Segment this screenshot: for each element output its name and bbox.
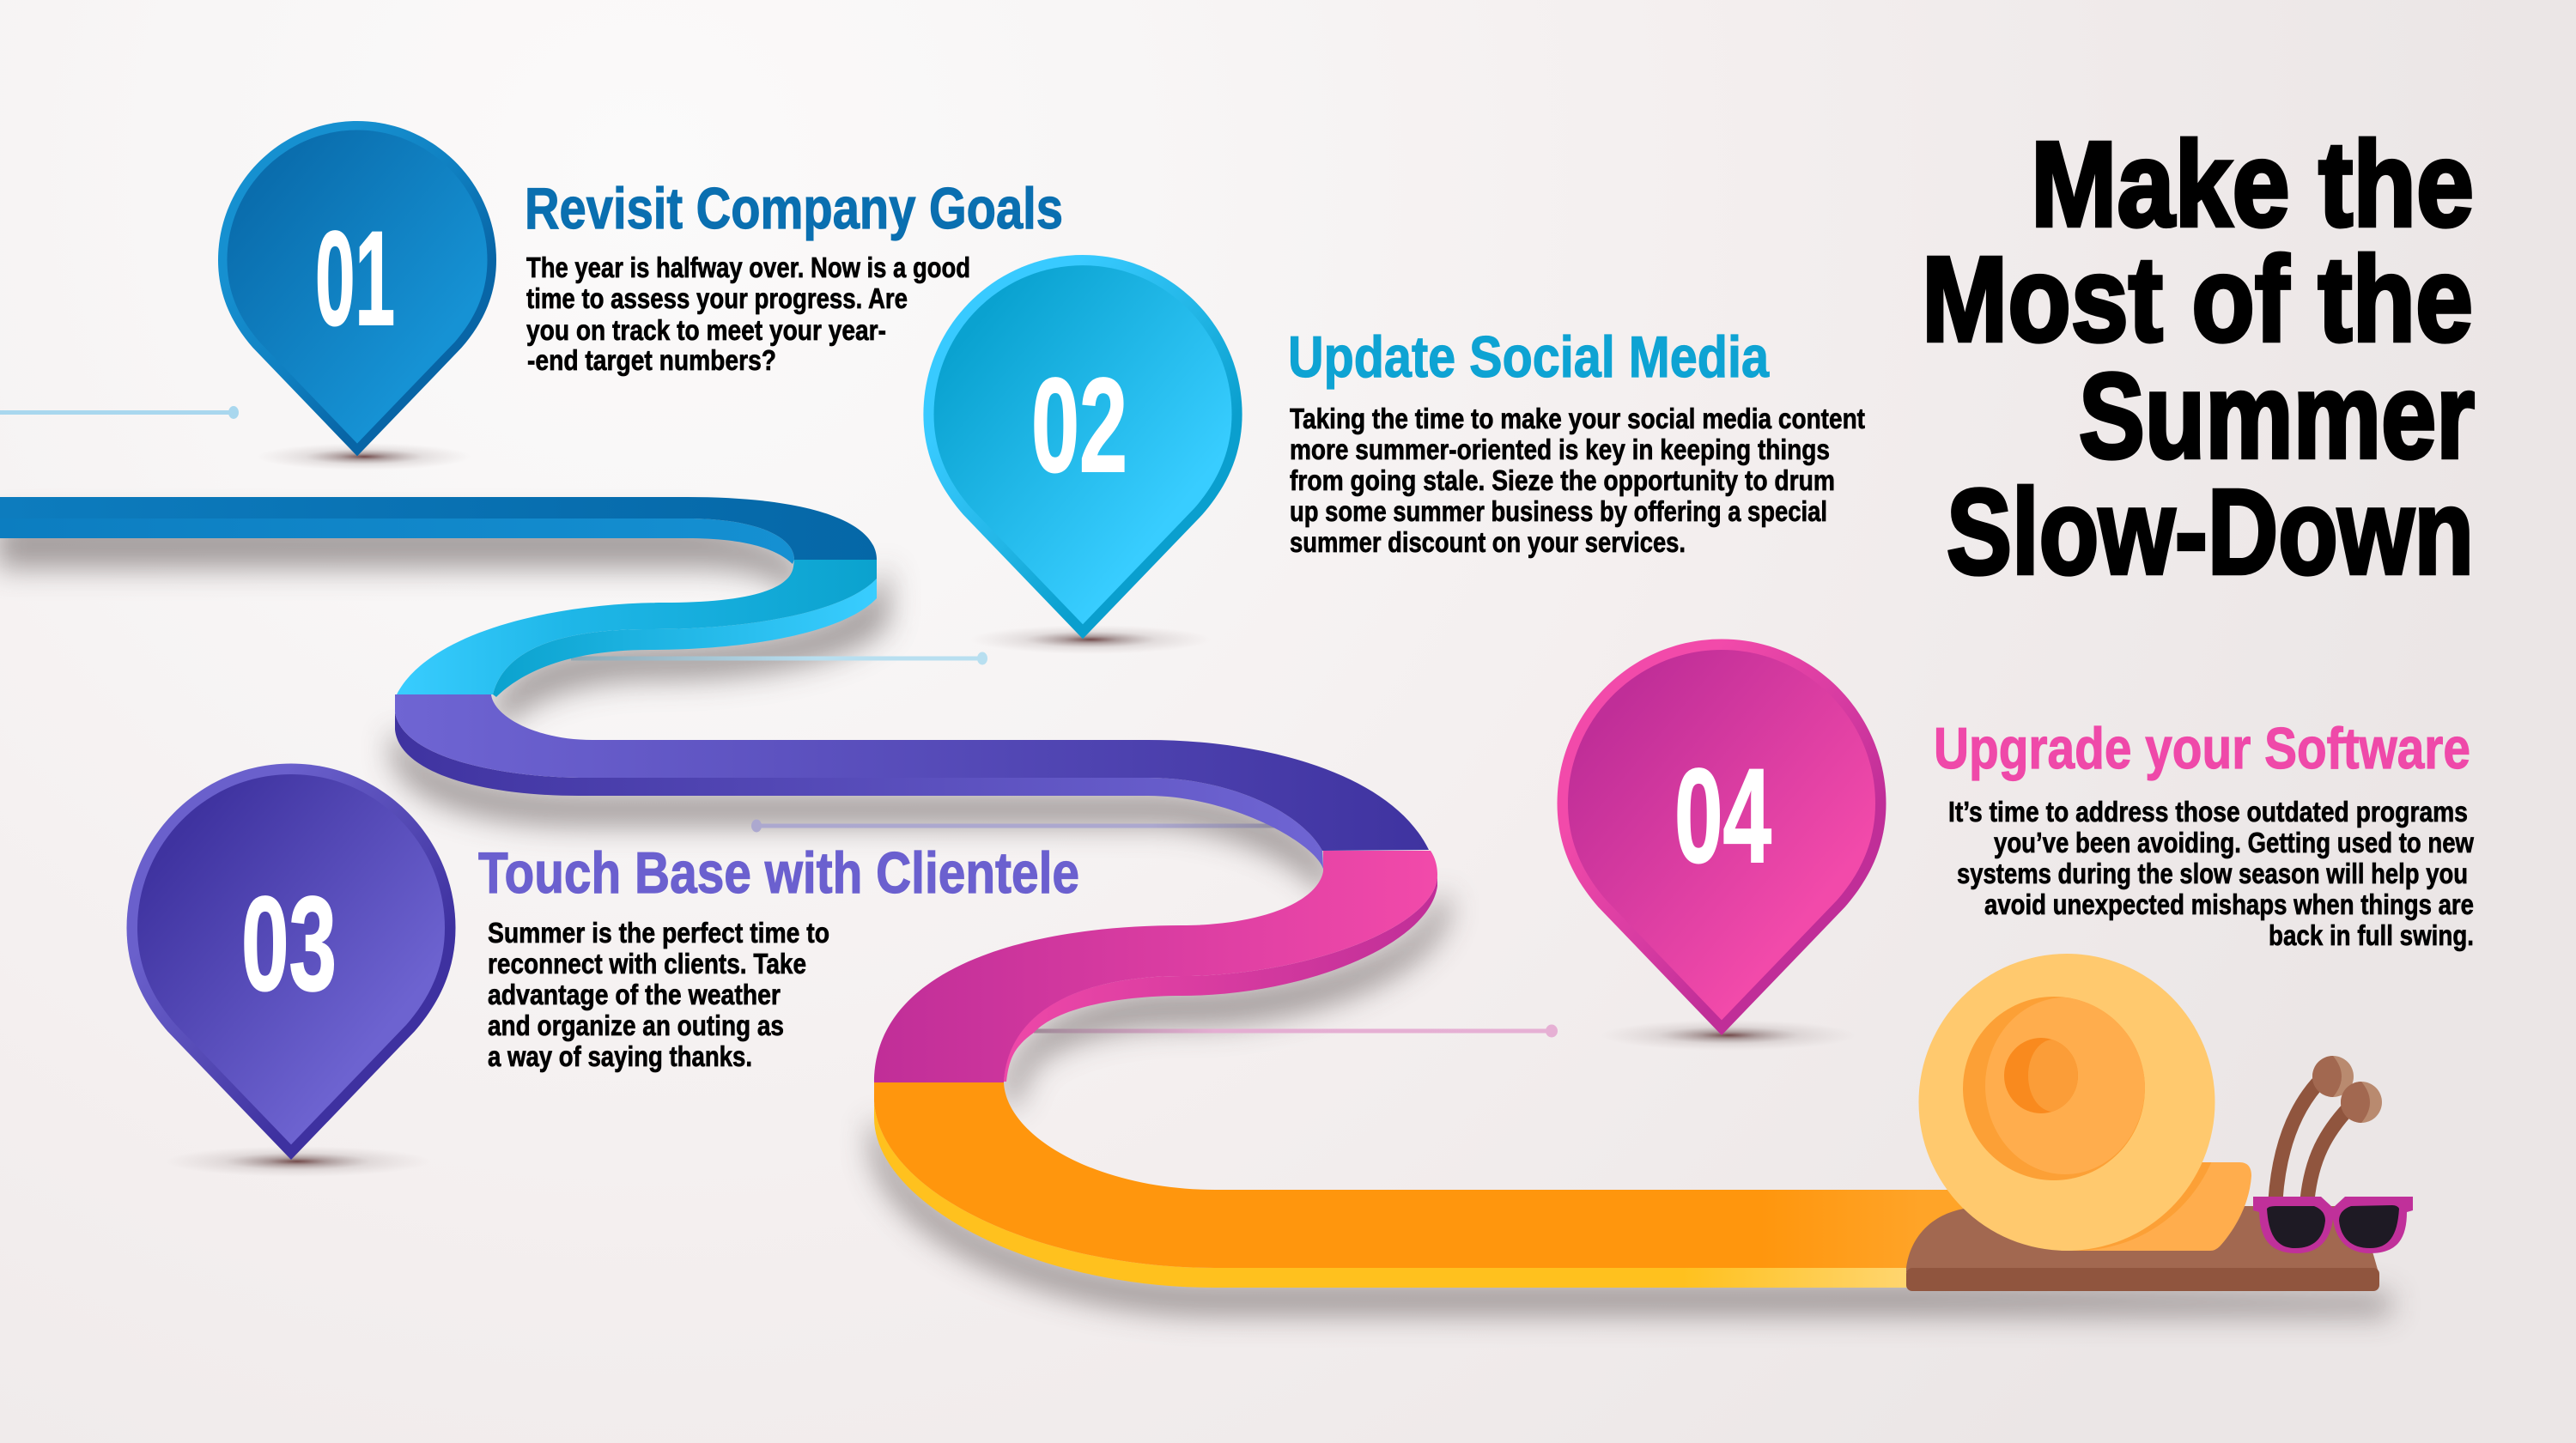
pin 02 [923, 255, 1242, 654]
text block: step 4 [1934, 716, 2474, 951]
snail tail lip [2061, 1162, 2251, 1251]
body text: step 3 [488, 917, 829, 1072]
heading: Update Social Media: Update Social Media [1288, 324, 1770, 390]
text block: step 2 [1288, 324, 1865, 558]
road segment: orange [874, 1082, 1975, 1288]
pin 02: 02 [1031, 351, 1127, 500]
connector line 4 [1034, 1025, 1558, 1037]
heading: Upgrade your Software: Upgrade your Software [1934, 716, 2470, 781]
body text: step 2: up some summer business by offering a special [1290, 495, 1827, 527]
icon: snail with sunglasses [1906, 954, 2413, 1291]
pin 04 [1558, 639, 1886, 1051]
body text: step 4: It’s time to address those outdated programs [1948, 796, 2468, 828]
body text: step 3: a way of saying thanks. [488, 1040, 752, 1072]
body text: step 1: you on track to meet your year- [526, 314, 886, 346]
body text: step 1 [526, 252, 970, 376]
title [1922, 116, 2475, 599]
connector line 1 [0, 406, 239, 419]
body text: step 2: from going stale. Sieze the opportunity to drum [1290, 464, 1835, 496]
body text: step 4 [1948, 796, 2474, 951]
body text: step 4: systems during the slow season will help you [1957, 858, 2468, 889]
heading: Touch Base with Clientele: Touch Base with Clientele [478, 840, 1079, 906]
heading: Revisit Company Goals: Revisit Company Goals [525, 176, 1063, 241]
body text: step 2: summer discount on your services. [1290, 526, 1686, 558]
body text: step 4: avoid unexpected mishaps when things are [1984, 888, 2474, 920]
road: winding path [0, 497, 1975, 1288]
sunglasses [2253, 1197, 2413, 1253]
road segment: blue [0, 497, 877, 564]
title: Make the [2031, 116, 2474, 252]
road segment: pink [874, 851, 1437, 1082]
pin 01 [218, 121, 496, 470]
title: Most of the [1922, 231, 2473, 367]
title: Summer [2079, 348, 2475, 483]
body text: step 4: back in full swing. [2269, 919, 2474, 951]
snail body [1906, 1206, 2379, 1291]
body text: step 3: advantage of the weather [488, 979, 781, 1010]
body text: step 2 [1290, 403, 1865, 558]
snail shell [1918, 954, 2215, 1251]
road segment: cyan [397, 560, 877, 697]
text block: step 3 [478, 840, 1079, 1072]
body text: step 3: Summer is the perfect time to [488, 917, 829, 949]
body text: step 3: reconnect with clients. Take [488, 948, 806, 979]
pin 04: 04 [1674, 742, 1771, 891]
connector line 3 [751, 819, 1283, 833]
connector line 2 [571, 652, 987, 664]
pin 03: 03 [241, 870, 337, 1019]
pin 01: 01 [315, 204, 395, 354]
body text: step 1: time to assess your progress. Are [526, 282, 908, 314]
pin 03 [127, 764, 455, 1177]
text block: step 1 [525, 176, 1063, 376]
body text: step 2: more summer-oriented is key in keeping things [1290, 434, 1830, 465]
road segment: purple [395, 694, 1429, 869]
road shadow [4, 529, 2383, 1307]
body text: step 2: Taking the time to make your social media content [1290, 403, 1865, 434]
body text: step 3: and organize an outing as [488, 1009, 784, 1041]
snail antennae [2275, 1056, 2382, 1200]
body text: step 4: you’ve been avoiding. Getting used to new [1994, 827, 2474, 858]
body text: step 1: -end target numbers? [527, 344, 776, 376]
body text: step 1: The year is halfway over. Now is a good [526, 252, 970, 283]
